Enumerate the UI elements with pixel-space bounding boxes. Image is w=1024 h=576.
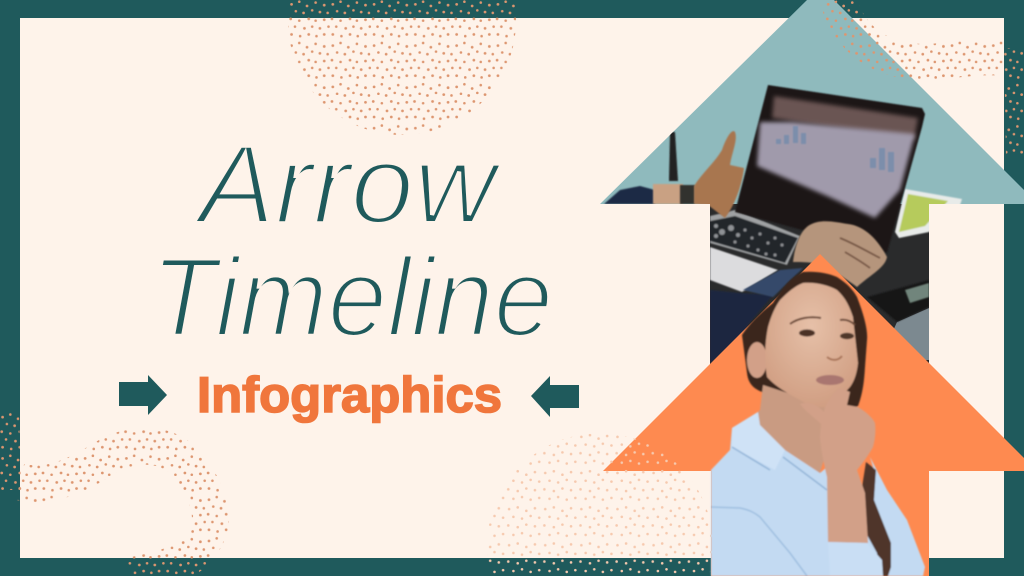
title <box>151 122 553 360</box>
shirt fold line <box>711 507 807 576</box>
sleeve lighter cuff <box>743 268 803 297</box>
arrow right icon <box>119 375 167 415</box>
collar fold line <box>732 447 827 490</box>
desk <box>710 204 929 374</box>
left wrist <box>653 184 683 204</box>
tablet <box>895 189 962 238</box>
hair <box>742 272 867 412</box>
eyes and brows <box>790 317 855 339</box>
photo: laptop scene <box>604 85 962 374</box>
teal arrow shape <box>600 0 1024 300</box>
title line: Timeline: Timeline <box>151 235 553 360</box>
dotted half circle top <box>288 0 516 135</box>
hand on chin <box>800 388 875 543</box>
ear <box>747 342 767 378</box>
screen charts <box>776 126 894 172</box>
braid <box>862 462 891 576</box>
desk lower grey <box>894 308 929 360</box>
collar <box>732 412 785 470</box>
dotted circle bottom center <box>487 433 713 576</box>
person thinking <box>711 272 925 576</box>
arrow left icon <box>531 376 579 417</box>
pointing hand <box>694 131 744 218</box>
orange arrow <box>603 254 1024 576</box>
title line: Arrow: Arrow <box>193 122 502 247</box>
dotted squiggle bottom left <box>8 410 210 576</box>
watch <box>680 185 695 204</box>
screen upper brown <box>772 96 918 140</box>
shirt <box>711 412 925 576</box>
keyboard <box>710 210 800 265</box>
typing hand <box>793 221 887 287</box>
nose <box>827 356 842 360</box>
laptop base silver <box>710 247 778 292</box>
face <box>765 283 858 407</box>
phone <box>867 280 929 322</box>
shirt cuff <box>828 542 883 576</box>
pen <box>669 132 678 181</box>
dotted squiggle top right <box>838 0 1016 155</box>
neck <box>747 385 828 473</box>
finger shadows <box>840 238 880 268</box>
screen light area <box>757 122 915 218</box>
teal arrow with photo <box>600 0 1024 374</box>
laptop lid <box>735 85 925 253</box>
navy sleeve <box>710 290 773 364</box>
subtitle: Infographics <box>197 367 502 423</box>
lips <box>816 375 844 385</box>
left navy sleeve <box>604 186 655 204</box>
